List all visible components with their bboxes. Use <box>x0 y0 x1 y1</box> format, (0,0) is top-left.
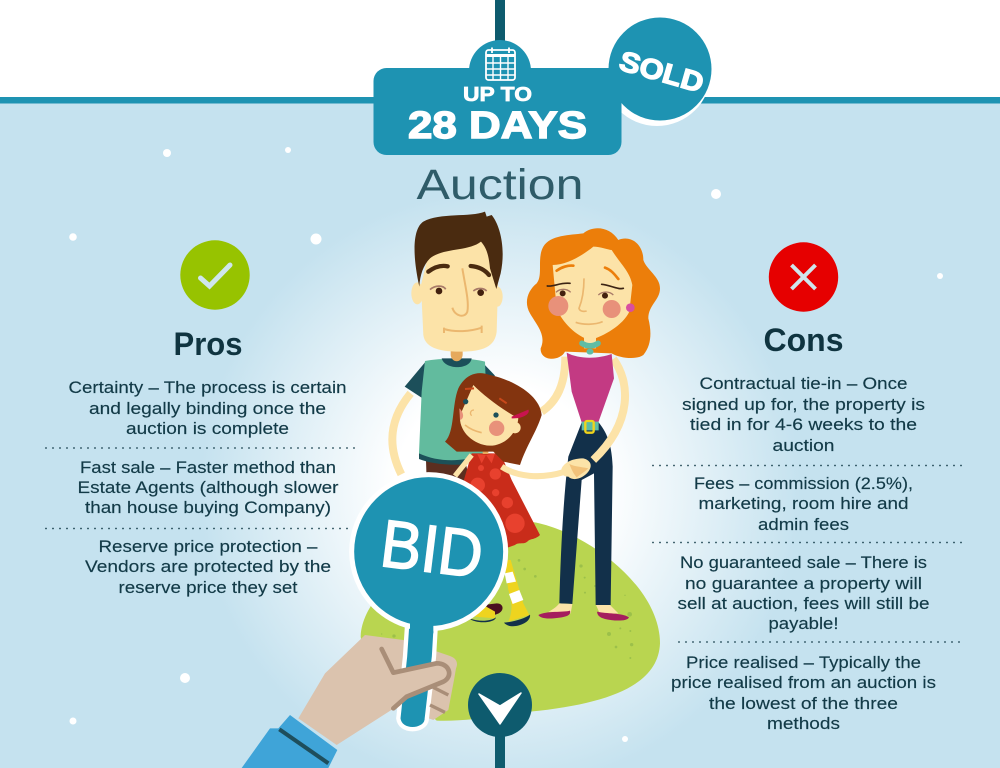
woman belt <box>582 421 599 433</box>
paddle head <box>352 475 506 629</box>
man shirt <box>419 359 488 464</box>
pro: reserve price: Reserve price protection – <box>98 538 318 556</box>
pro: reserve price: reserve price they set <box>118 579 298 597</box>
woman hair <box>527 228 660 359</box>
man sleeves <box>405 362 495 398</box>
pro: reserve price: Vendors are protected by the <box>85 558 331 576</box>
con: fees: admin fees <box>758 516 849 534</box>
pro: certainty <box>68 379 346 438</box>
pro: certainty: and legally binding once the <box>89 400 326 418</box>
con: price realised <box>671 654 936 733</box>
sold badge <box>603 18 712 126</box>
pro: certainty: auction is complete <box>126 420 289 438</box>
bid text: BID <box>377 506 487 593</box>
con: price realised: methods <box>767 715 840 733</box>
icon: cross <box>769 242 838 312</box>
girl arms and hands <box>455 455 591 479</box>
duration text: 28 DAYS <box>408 105 587 147</box>
con: no guaranteed sale <box>678 554 930 633</box>
pro: fast sale: than house buying Company) <box>85 499 331 517</box>
con: no guaranteed sale: sell at auction, fees will still be <box>678 595 930 613</box>
girl face <box>459 385 529 446</box>
con: contractual tie-in: tied in for 4-6 weeks to the <box>690 416 917 434</box>
icon: chevron down <box>479 693 521 724</box>
man neck <box>451 350 463 361</box>
pro: fast sale: Fast sale – Faster method than <box>80 459 336 477</box>
icon: check <box>180 240 250 310</box>
paddle handle <box>398 622 436 729</box>
header band <box>0 97 1000 104</box>
con: fees <box>694 475 913 534</box>
con: no guaranteed sale: payable! <box>768 615 838 633</box>
man shirt hem <box>419 453 466 465</box>
girl hair <box>445 373 542 465</box>
woman trousers <box>538 420 629 621</box>
con: no guaranteed sale: no guarantee a property will <box>685 575 922 593</box>
pros heading: Pros <box>174 326 242 362</box>
con: no guaranteed sale: No guaranteed sale – There is <box>680 554 927 572</box>
title: Auction <box>416 161 584 209</box>
panel: cons <box>653 242 966 733</box>
blue neck join <box>410 617 433 633</box>
duration text: UP TO <box>463 84 532 106</box>
pro: fast sale <box>78 459 339 517</box>
man trousers <box>426 460 470 482</box>
con: price realised: the lowest of the three <box>709 695 898 713</box>
girl <box>445 373 591 626</box>
girl dress <box>460 453 540 547</box>
dress dots <box>470 453 525 533</box>
hand <box>298 635 457 745</box>
woman top <box>567 353 614 422</box>
background dots <box>69 147 943 742</box>
duration badge <box>374 40 622 155</box>
woman <box>242 228 660 768</box>
man collar <box>442 358 472 367</box>
pro: fast sale: Estate Agents (although slower <box>78 479 339 497</box>
woman face <box>547 247 635 352</box>
timeline stem top <box>495 0 505 44</box>
girl neck <box>483 443 488 454</box>
con: price realised: Price realised – Typically the <box>686 654 921 672</box>
man <box>392 212 503 482</box>
cuff band <box>279 729 328 763</box>
con: contractual tie-in: Contractual tie-in – Once <box>700 375 908 393</box>
woman necklace <box>582 343 598 352</box>
hand with bid paddle <box>242 475 506 768</box>
con: price realised: price realised from an auction is <box>671 674 936 692</box>
woman arms <box>542 357 625 460</box>
thumb and fingers <box>387 663 450 708</box>
pro: certainty: Certainty – The process is certain <box>68 379 346 397</box>
con: contractual tie-in: auction <box>772 437 834 455</box>
pro: reserve price <box>85 538 331 597</box>
con: fees: Fees – commission (2.5%), <box>694 475 913 493</box>
green hill <box>361 521 660 721</box>
icon: calendar <box>486 48 515 80</box>
sleeve <box>242 715 337 768</box>
girl legs and shoes <box>469 560 530 626</box>
duration text <box>408 84 587 147</box>
panel: pros <box>46 240 360 597</box>
con: contractual tie-in <box>682 375 925 455</box>
man arm <box>392 393 411 474</box>
man head <box>411 212 503 352</box>
sold badge: SOLD <box>616 45 707 99</box>
cons heading: Cons <box>764 322 844 358</box>
con: fees: marketing, room hire and <box>698 495 908 513</box>
con: contractual tie-in: signed up for, the property is <box>682 396 925 414</box>
bottom marker <box>468 673 532 768</box>
